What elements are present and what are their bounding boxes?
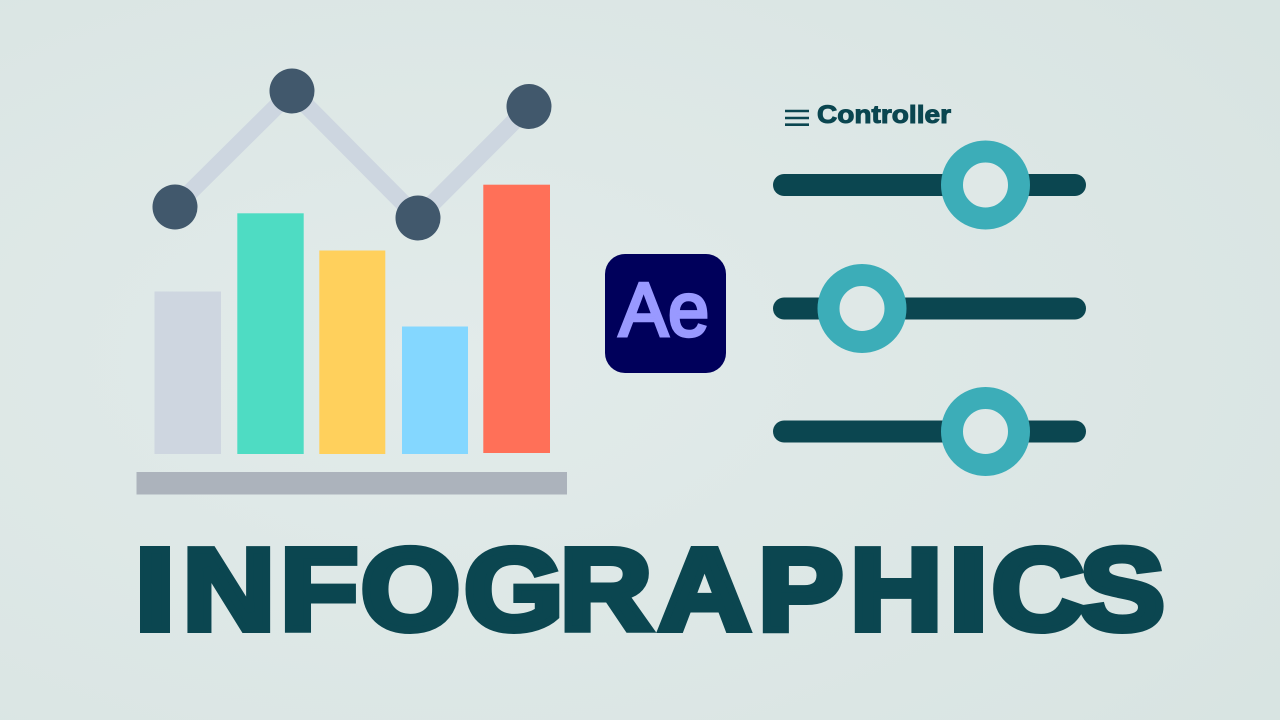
icon: After Effects logo <box>605 254 726 373</box>
chart baseline <box>136 472 567 494</box>
slider 3 <box>773 398 1086 465</box>
slider 1 <box>773 152 1086 218</box>
line chart <box>152 68 552 240</box>
slider 2 <box>773 275 1086 342</box>
controller heading: Controller <box>817 101 951 129</box>
icon: After Effects logo: Ae <box>619 268 709 353</box>
bar chart <box>154 185 550 454</box>
title: INFOGRAPHICS <box>139 525 1165 654</box>
icon: menu <box>785 111 809 125</box>
